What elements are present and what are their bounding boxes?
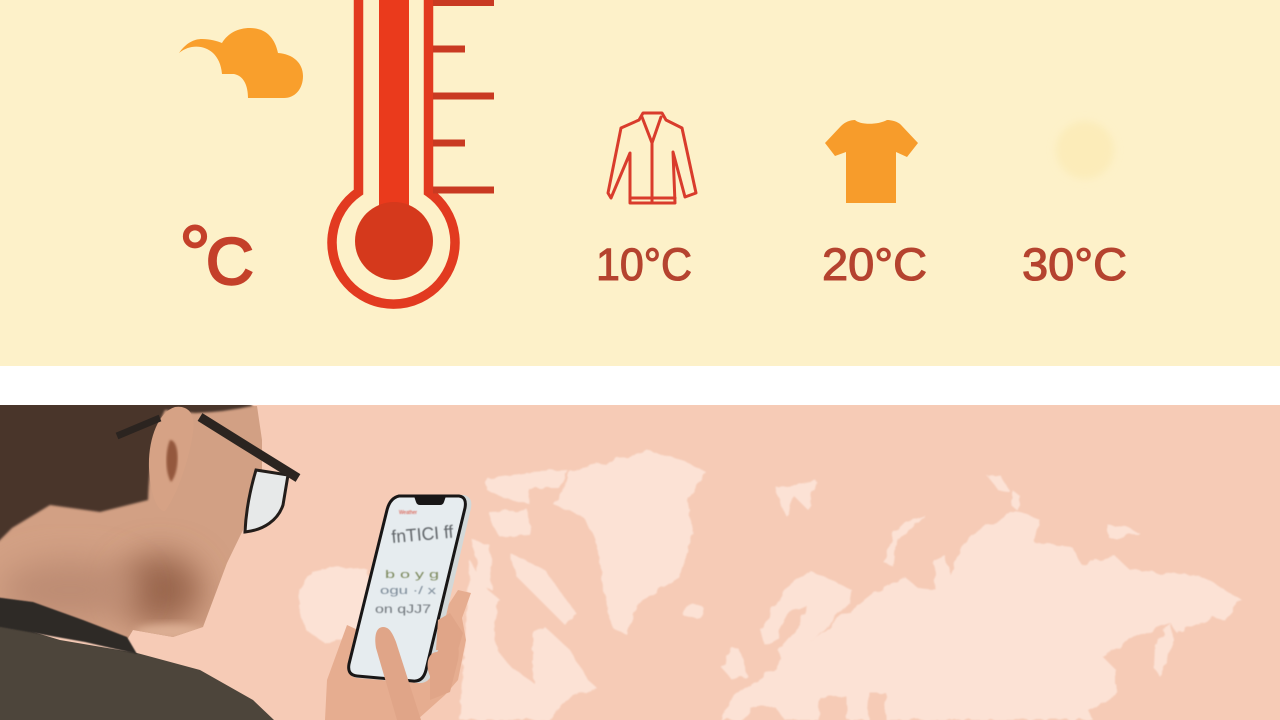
phone screen text — [375, 510, 455, 616]
label: degrees Celsius: C — [206, 224, 254, 298]
North America — [460, 560, 597, 720]
phone screen text: ogu ·/ x — [380, 585, 437, 597]
face and neck — [0, 405, 270, 645]
phone screen text: fnTICI ff — [391, 522, 455, 547]
jacket — [0, 622, 274, 720]
Greenland — [554, 451, 706, 635]
label: degrees Celsius — [179, 209, 254, 298]
fingers — [375, 613, 463, 720]
label: 10°C: 10°C — [596, 239, 692, 290]
hair — [0, 395, 252, 552]
phone screen text: b o y g — [385, 569, 439, 581]
Iceland — [681, 604, 705, 618]
label: 20°C: 20°C — [822, 239, 927, 290]
icon: jacket — [608, 113, 696, 203]
jacket collar — [0, 597, 137, 654]
panel: temperature guide — [0, 0, 1280, 366]
label: 30°C: 30°C — [1022, 239, 1127, 290]
Novaya Zemlya — [884, 515, 925, 567]
person using phone — [0, 405, 467, 720]
Arctic islands — [988, 475, 1009, 492]
panel: world map and phone user — [0, 405, 1280, 720]
icon: faint sun — [1056, 121, 1114, 179]
world map — [298, 451, 1242, 720]
hand holding phone — [325, 590, 471, 720]
Scandinavia — [761, 570, 852, 662]
ear — [149, 407, 194, 511]
icon: cloud — [179, 28, 303, 98]
Svalbard — [776, 480, 816, 517]
icon: t-shirt — [825, 120, 918, 203]
Alaska — [298, 567, 372, 643]
phone screen text: on qJJ7 — [375, 602, 431, 616]
phone screen text: Weather — [399, 510, 417, 516]
United Kingdom — [721, 647, 748, 680]
phone — [348, 495, 471, 683]
thermometer ticks — [433, 0, 494, 194]
Sakhalin — [1154, 623, 1174, 677]
white band over hair blur — [0, 366, 1280, 405]
label: degrees Celsius: ° — [179, 209, 211, 298]
Canadian archipelago — [487, 470, 568, 505]
icon: thermometer — [332, 0, 494, 304]
Eurasia — [721, 510, 1242, 720]
phone notch — [414, 496, 446, 505]
glasses — [117, 417, 298, 532]
